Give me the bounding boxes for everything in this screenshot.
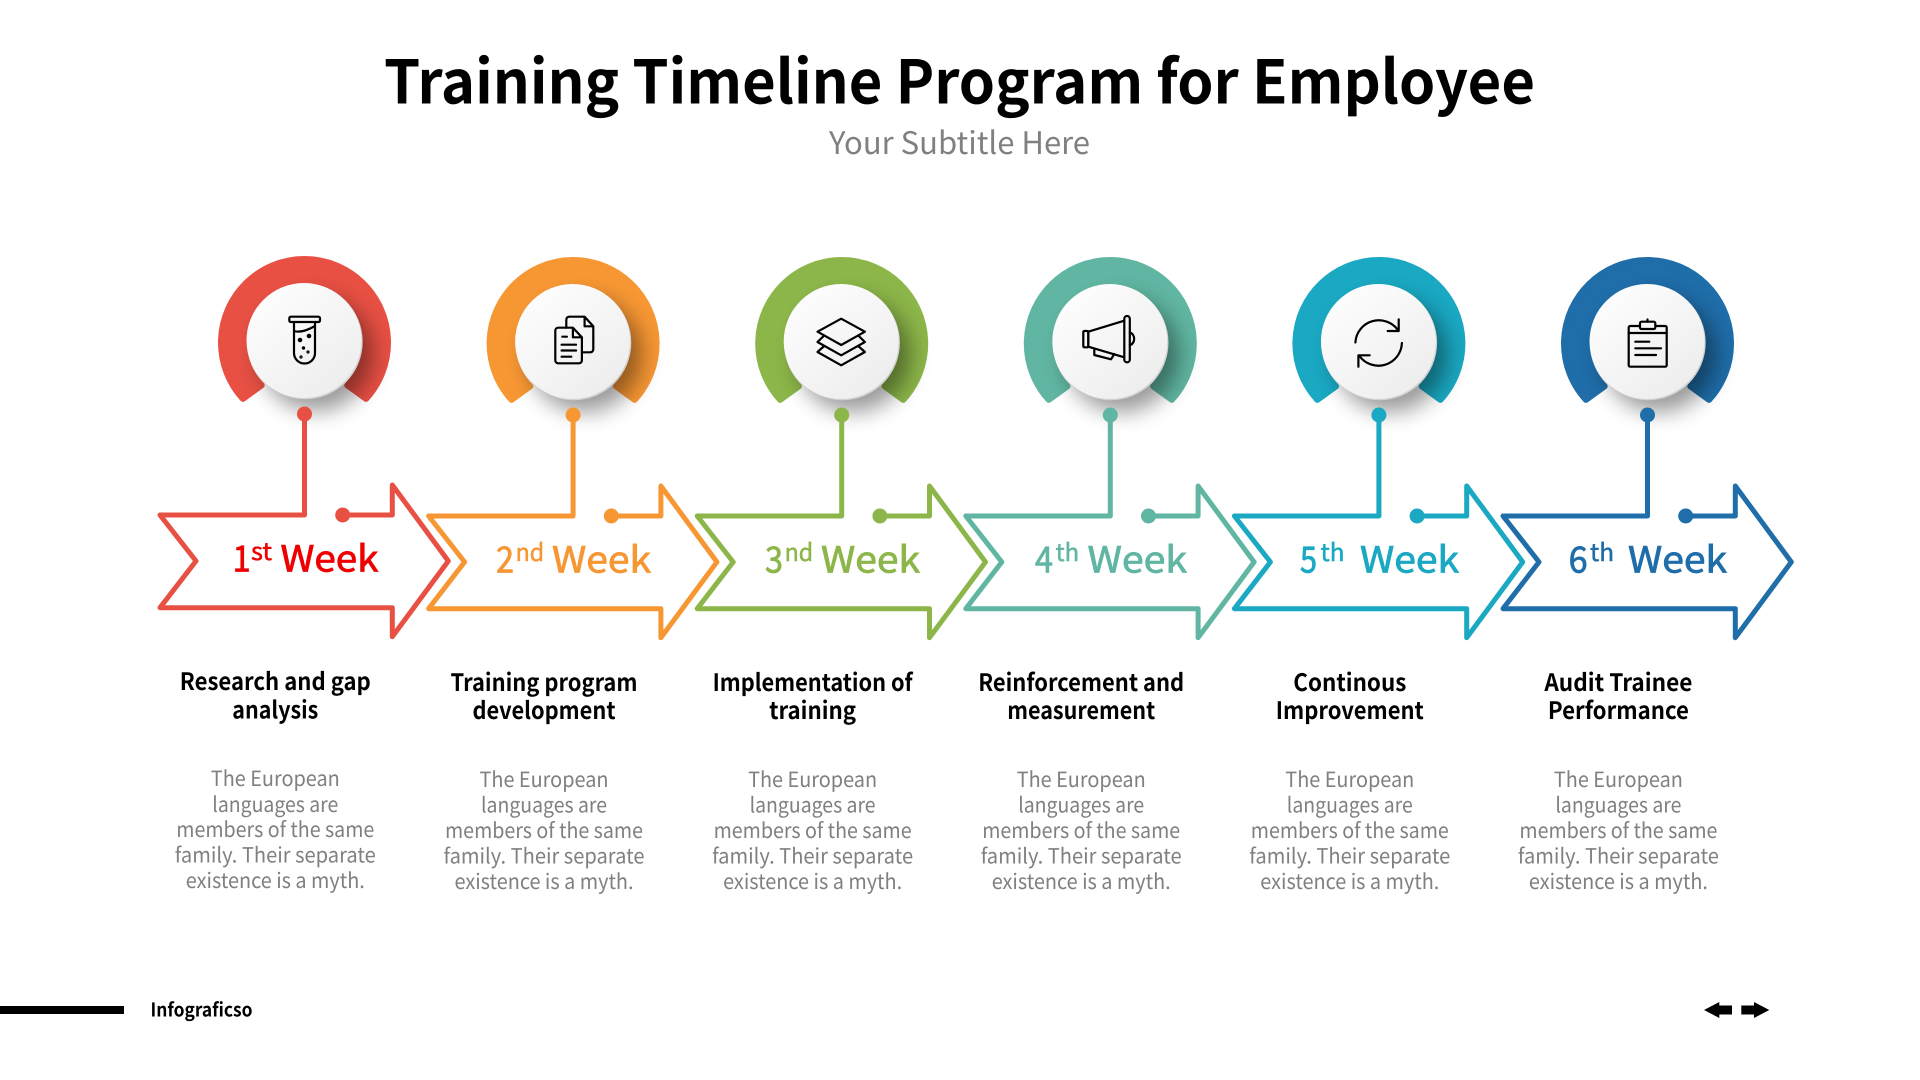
body: week 6 (1518, 764, 1719, 896)
heading: week 5: Improvement (1276, 691, 1424, 726)
body: week 1: languages are (212, 789, 338, 819)
label: 3nd Week: 3 (765, 532, 783, 584)
arrow: week 5 (1234, 408, 1523, 638)
body: week 6: languages are (1555, 790, 1681, 820)
week 1 column (160, 259, 448, 895)
title: Training Timeline Program for Employee (384, 34, 1535, 122)
label: 1st Week (233, 531, 379, 583)
label: 4th Week: Week (1088, 532, 1187, 584)
body: week 4: languages are (1018, 790, 1144, 820)
body: week 2 (444, 764, 644, 896)
badge: week 4 (1027, 260, 1194, 412)
label: 4th Week: th (1056, 533, 1079, 568)
week 2 column (429, 260, 717, 896)
heading: week 5 (1276, 663, 1424, 726)
label: 5th Week: th (1320, 533, 1344, 568)
icon: previous arrow (1704, 1002, 1732, 1018)
label: 1st Week: st (251, 532, 272, 567)
label: 6th Week: Week (1628, 532, 1727, 584)
body: week 5: family. Their separate (1249, 840, 1450, 870)
body: week 6: family. Their separate (1518, 840, 1719, 870)
body: week 5: members of the same (1251, 815, 1449, 845)
icon: documents (555, 317, 593, 363)
body: week 6: members of the same (1519, 815, 1717, 845)
body: week 2: languages are (481, 790, 607, 820)
body: week 4: family. Their separate (981, 840, 1182, 870)
heading: week 1 (180, 662, 371, 726)
heading: week 4: measurement (1007, 691, 1155, 726)
heading: week 3: Implementation of (713, 663, 914, 698)
body: week 5: existence is a myth. (1260, 866, 1439, 896)
body: week 2: family. Their separate (444, 840, 644, 870)
label: 1st Week: 1 (233, 531, 251, 583)
label: 3nd Week: nd (785, 533, 813, 568)
label: 5th Week: Week (1360, 532, 1459, 584)
arrow: week 3 (697, 408, 986, 638)
heading: week 2: Training program (450, 663, 638, 698)
label: 3nd Week: Week (821, 532, 920, 584)
arrow: week 2 (429, 408, 717, 638)
heading: week 2: development (472, 691, 616, 726)
heading: week 2 (450, 663, 638, 726)
heading: week 6: Audit Trainee (1543, 663, 1692, 698)
heading: week 1: analysis (232, 690, 318, 726)
badge: week 2 (490, 260, 657, 412)
icon: clipboard (1629, 320, 1667, 367)
week 3 column (697, 260, 986, 896)
badge: week 5 (1295, 260, 1462, 412)
body: week 5 (1249, 764, 1450, 896)
heading: week 3: training (769, 691, 856, 726)
body: week 1: family. Their separate (175, 840, 376, 870)
footer brand: Infograficso (150, 996, 253, 1023)
label: 2nd Week: Week (552, 532, 651, 584)
label: 4th Week: 4 (1035, 532, 1053, 584)
body: week 2: members of the same (445, 815, 643, 845)
body: week 1 (175, 763, 376, 895)
badge: week 6 (1564, 260, 1731, 412)
subtitle: Your Subtitle Here (828, 118, 1090, 163)
body: week 3 (712, 764, 913, 896)
heading: week 6 (1543, 663, 1692, 726)
body: week 2: The European (480, 764, 608, 794)
body: week 3: family. Their separate (712, 840, 913, 870)
heading: week 6: Performance (1548, 691, 1689, 726)
body: week 5: languages are (1287, 790, 1413, 820)
label: 5th Week (1300, 532, 1459, 584)
week 5 column (1234, 260, 1523, 896)
body: week 2: existence is a myth. (454, 866, 634, 896)
label: 2nd Week: 2 (496, 532, 514, 584)
body: week 1: members of the same (176, 814, 374, 844)
arrow: week 4 (966, 408, 1254, 638)
arrow: week 1 (160, 406, 448, 637)
heading: week 5: Continous (1293, 663, 1406, 698)
icon: next arrow (1741, 1002, 1769, 1018)
icon: refresh (1355, 319, 1402, 367)
body: week 4: existence is a myth. (992, 866, 1171, 896)
week 4 column (966, 260, 1254, 896)
body: week 4: members of the same (982, 815, 1180, 845)
label: 2nd Week: nd (516, 533, 544, 568)
body: week 3: existence is a myth. (723, 866, 902, 896)
footer bar (0, 1006, 124, 1014)
body: week 4: The European (1017, 764, 1146, 794)
label: 5th Week: 5 (1300, 532, 1317, 584)
label: 3nd Week (765, 532, 920, 584)
body: week 3: languages are (750, 790, 876, 820)
body: week 1: existence is a myth. (186, 865, 365, 895)
icon: megaphone (1083, 316, 1134, 362)
label: 4th Week (1035, 532, 1187, 584)
body: week 1: The European (211, 763, 340, 793)
icon: layers (818, 319, 865, 365)
arrow: week 6 (1503, 408, 1791, 638)
label: 6th Week: th (1590, 533, 1614, 568)
label: 2nd Week (496, 532, 651, 584)
heading: week 4 (978, 663, 1184, 726)
label: 6th Week: 6 (1569, 532, 1588, 584)
label: 6th Week (1569, 532, 1727, 584)
body: week 6: The European (1554, 764, 1683, 794)
body: week 4 (981, 764, 1182, 896)
heading: week 3 (713, 663, 914, 726)
badge: week 1 (221, 259, 388, 411)
heading: week 4: Reinforcement and (978, 663, 1184, 698)
body: week 3: members of the same (714, 815, 912, 845)
body: week 5: The European (1285, 764, 1414, 794)
icon: test tube (289, 317, 320, 364)
label: 1st Week: Week (280, 531, 379, 583)
week 6 column (1503, 260, 1791, 896)
body: week 3: The European (748, 764, 877, 794)
badge: week 3 (758, 260, 925, 412)
body: week 6: existence is a myth. (1529, 866, 1708, 896)
heading: week 1: Research and gap (180, 662, 371, 697)
